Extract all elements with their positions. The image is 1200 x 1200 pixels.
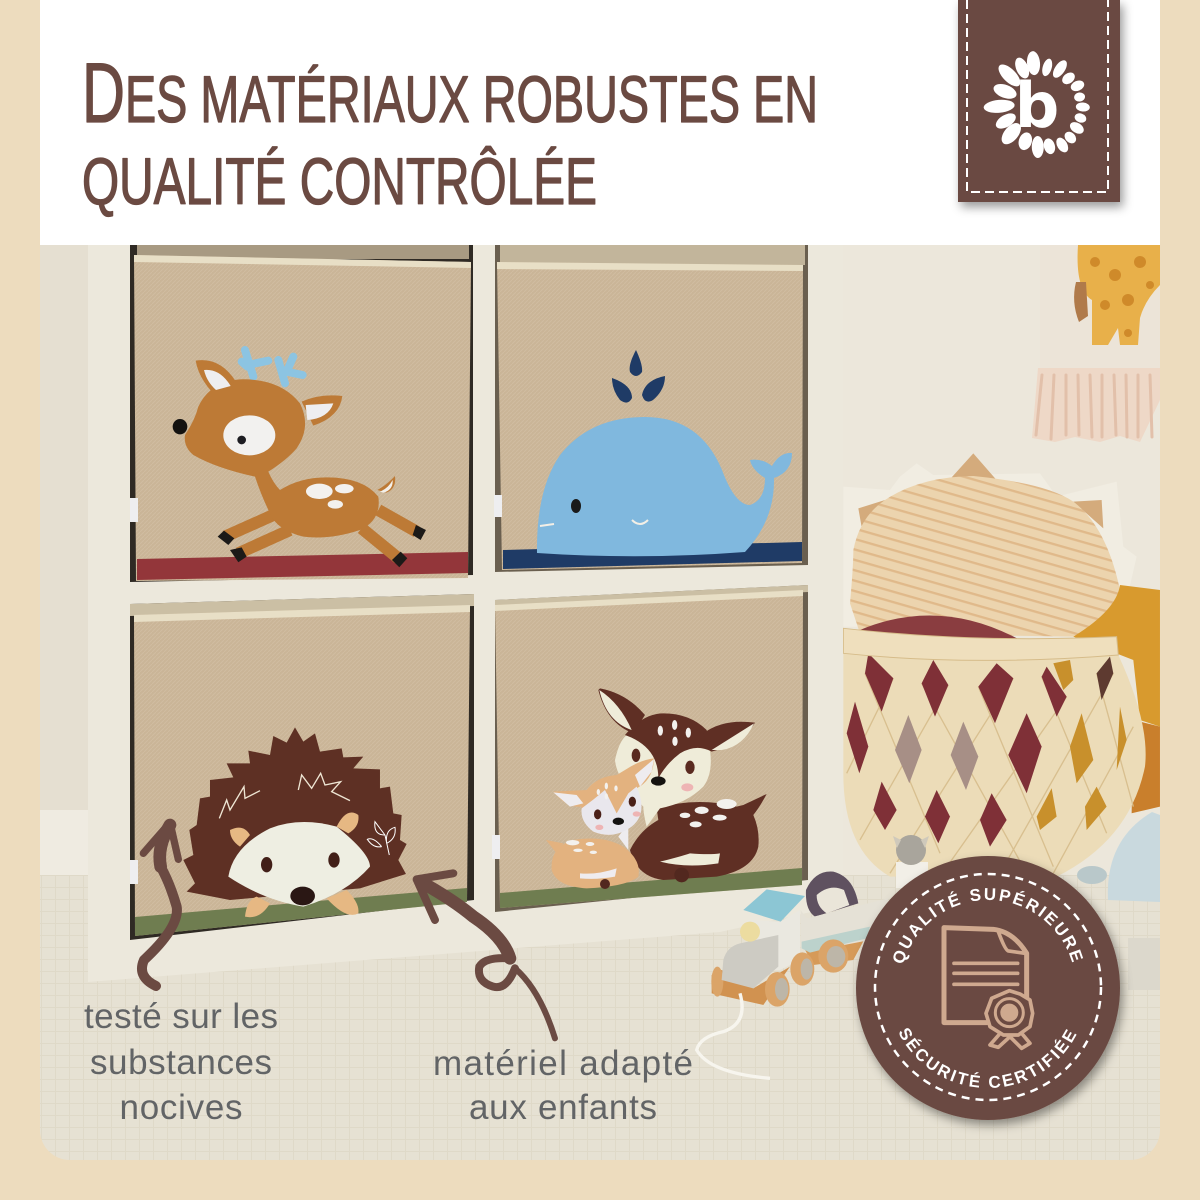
arrow: right — [417, 873, 555, 1038]
title: DES MATÉRIAUX ROBUSTES EN — [82, 46, 818, 140]
arrow: left — [142, 823, 178, 986]
caption: material: aux enfants — [469, 1088, 657, 1127]
icon: certificate — [944, 928, 1033, 1048]
caption: tested — [84, 1002, 277, 1120]
toy train — [697, 872, 888, 1078]
logo flower — [983, 51, 1090, 158]
box: fawns — [492, 590, 803, 908]
logo tag — [958, 0, 1120, 202]
fawns appliqué — [546, 688, 767, 889]
wall hanging — [1032, 245, 1160, 442]
red cushion — [860, 615, 1020, 640]
badge text top: QUALITÉ SUPÉRIEURE — [893, 888, 1084, 963]
cushion sun — [840, 453, 1160, 813]
caption: tested: nocives — [120, 1088, 242, 1127]
box: hedgehog — [130, 605, 470, 936]
photo panel — [40, 245, 1160, 1165]
whale appliqué — [537, 350, 792, 556]
quality badge — [852, 854, 1130, 1132]
box: deer — [130, 255, 471, 581]
wall — [843, 245, 1160, 875]
rug — [40, 875, 1160, 1165]
caption: tested: testé sur les — [84, 997, 278, 1036]
hedgehog appliqué — [183, 727, 407, 917]
caption: material: matériel adapté — [433, 1044, 693, 1083]
header panel — [40, 0, 1160, 246]
title: QUALITÉ CONTRÔLÉE — [82, 144, 597, 218]
back pillow — [843, 463, 1137, 627]
basket — [843, 628, 1146, 877]
deer appliqué — [173, 350, 426, 567]
small toys — [893, 812, 1160, 990]
box: whale — [494, 262, 803, 570]
mustard blanket — [1073, 585, 1160, 727]
logo flower: b — [1015, 69, 1059, 142]
shelf unit — [88, 245, 843, 982]
badge text bottom: SÉCURITÉ CERTIFIÉE — [900, 1028, 1076, 1088]
title — [82, 46, 818, 218]
caption: tested: substances — [90, 1043, 272, 1082]
sun cushion — [858, 453, 1103, 537]
caption: material — [435, 1049, 692, 1120]
